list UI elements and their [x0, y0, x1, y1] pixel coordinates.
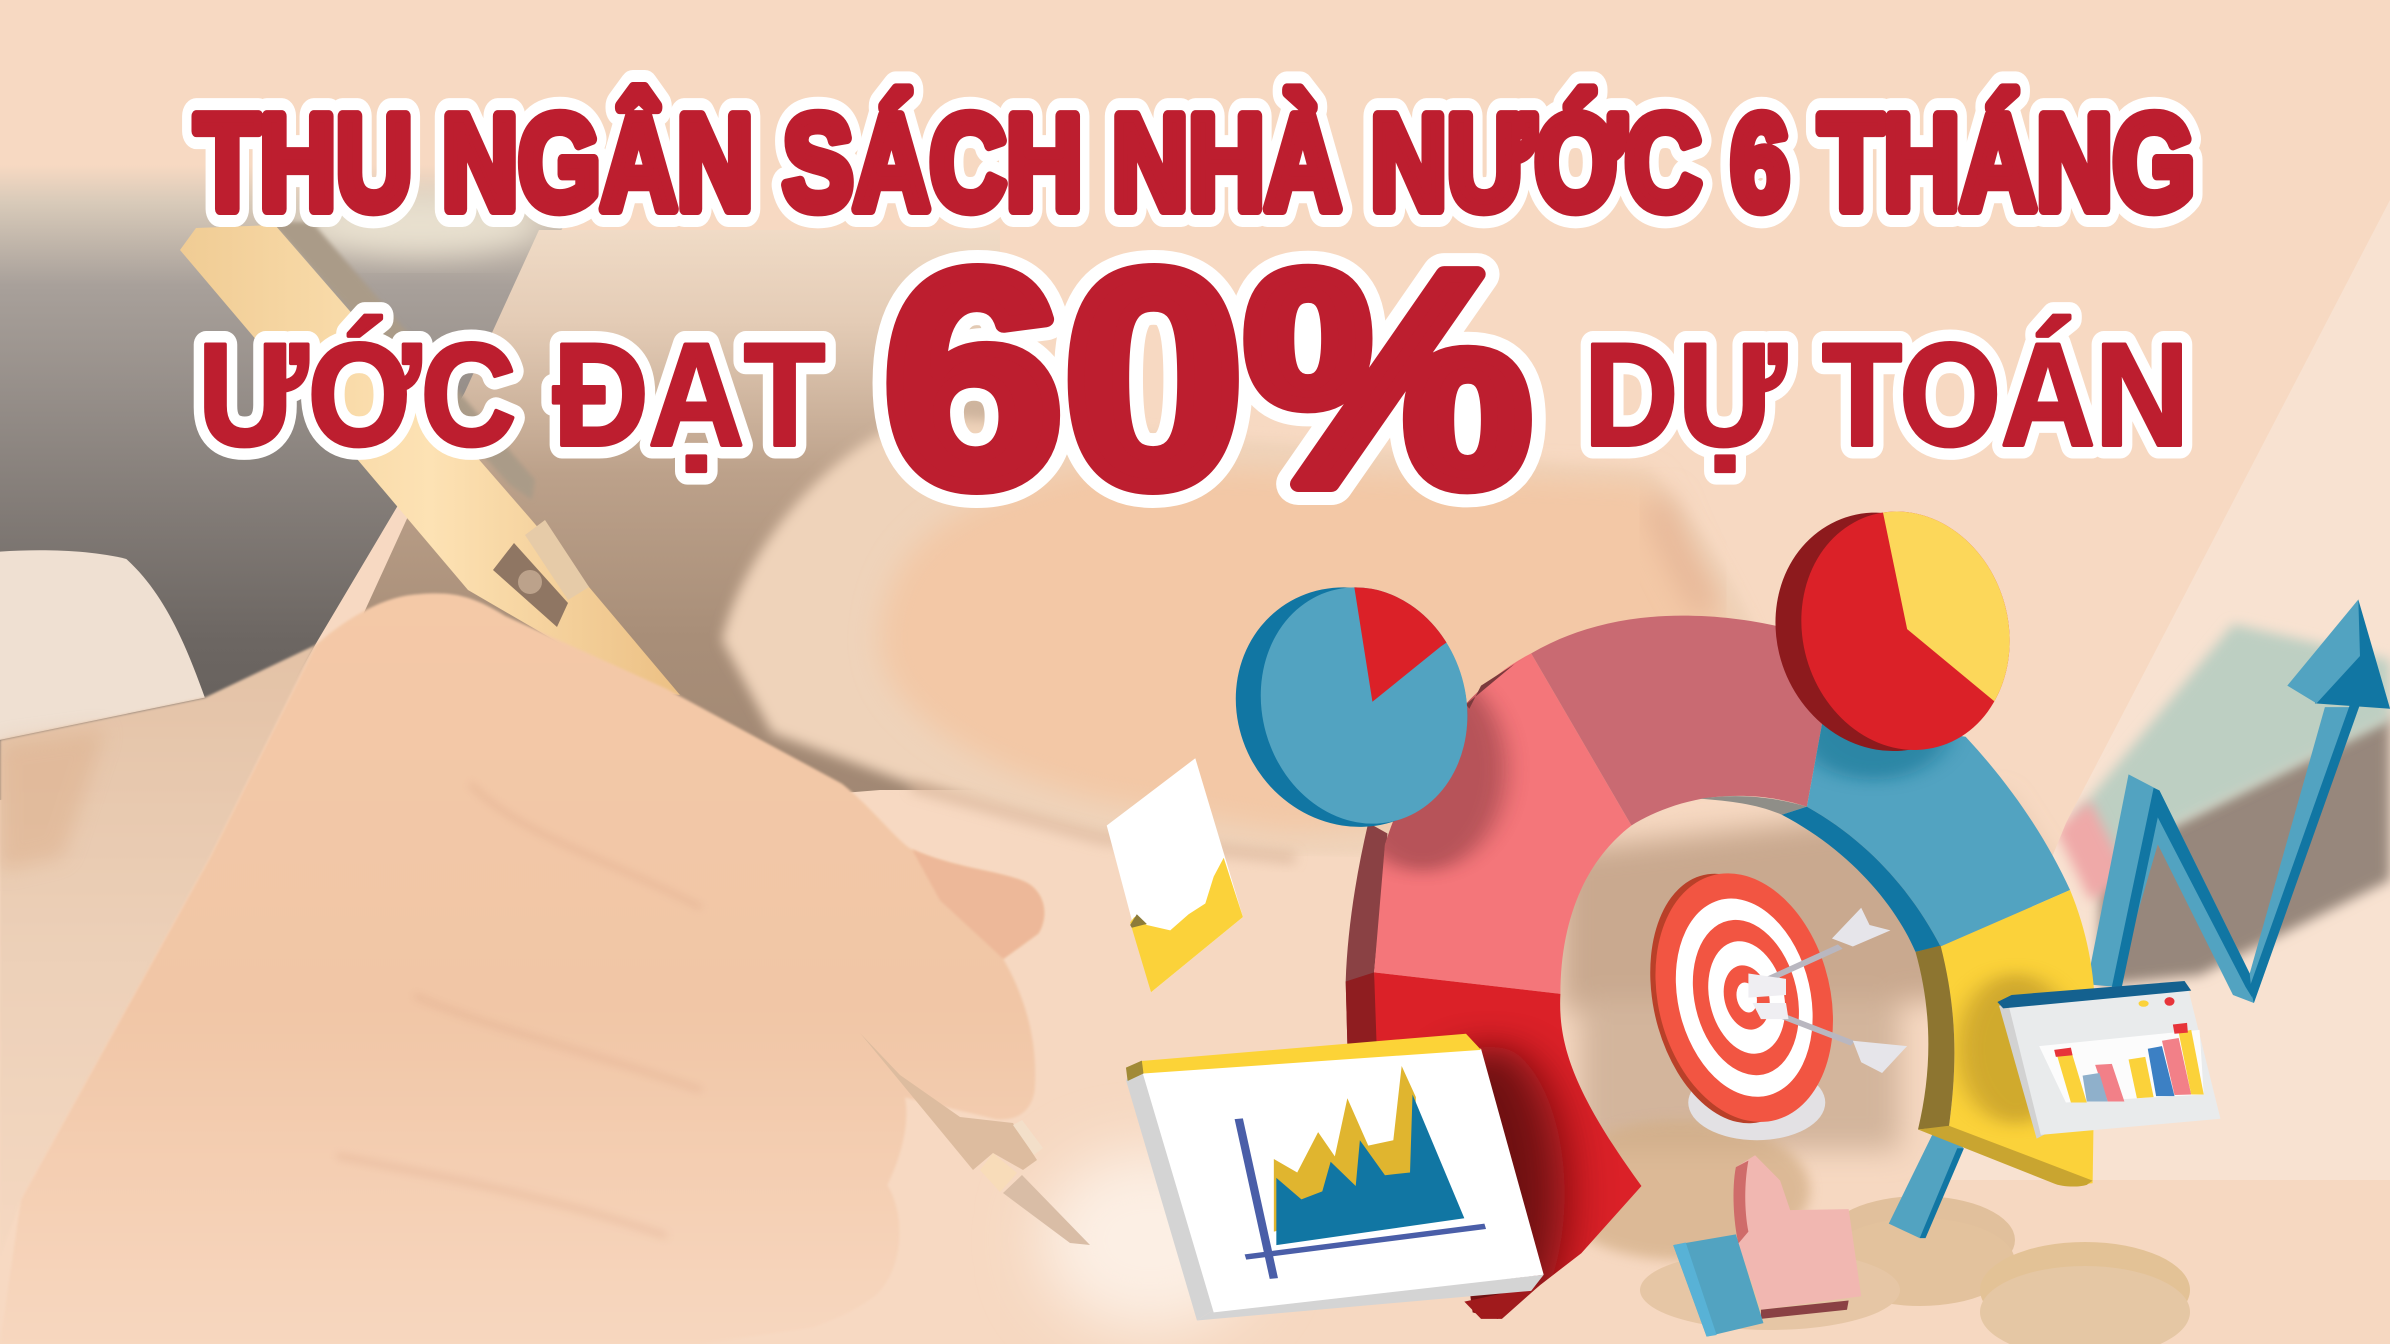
title line 2: left words: ƯỚC ĐẠT	[198, 313, 825, 476]
icon: thumbs up	[1673, 1155, 1861, 1337]
hand shadow on paper	[912, 786, 1295, 858]
chart: blue pie	[1236, 587, 1468, 827]
title line 2: right words: DỰ TOÁN	[1584, 313, 2189, 476]
arch back edge	[1346, 823, 1387, 1043]
light right triangle	[1920, 200, 2390, 1180]
calculator screen and body	[2056, 624, 2390, 985]
fingernail	[912, 849, 1044, 959]
chart: red and yellow pie	[1775, 512, 2010, 751]
title line 2: big 60 percent: 60%	[883, 208, 1532, 549]
title line 2: right words: DỰ TOÁN	[1584, 313, 2189, 476]
icon: rising zigzag arrow	[1889, 600, 2390, 1238]
hand	[0, 593, 1044, 1344]
finger creases	[337, 784, 702, 1236]
coins	[1550, 1120, 2190, 1344]
arch segment: red	[1374, 972, 1641, 1319]
background hand, blurred	[722, 415, 1780, 860]
title	[195, 87, 2195, 549]
paper and table	[1000, 810, 2390, 1344]
calculator, blurred	[1560, 800, 2090, 1150]
dark desk area, right of the diagonal	[260, 230, 1000, 840]
icon: target with arrows	[1632, 867, 1907, 1140]
area chart	[1239, 1066, 1485, 1278]
paper glow bottom left of chart card	[1040, 1150, 1260, 1330]
arch segment: yellow	[1941, 890, 2095, 1186]
shirt cuff	[0, 550, 205, 740]
writing hand photo	[0, 550, 1044, 1344]
infographic illustration	[1107, 500, 2390, 1344]
bars	[2054, 1023, 2204, 1103]
chart card: bar chart	[1997, 981, 2220, 1139]
sleeve	[0, 645, 316, 1258]
icon: small paper card	[1107, 758, 1243, 992]
title line 2: big 60 percent: 60%	[883, 208, 1532, 549]
arch segment: rose	[1531, 616, 1824, 825]
dark desk area, left of the diagonal	[0, 165, 600, 800]
pen barrel	[180, 222, 680, 695]
chart: arch gauge	[1339, 616, 2095, 1344]
arch segment: blue	[1807, 715, 2070, 947]
pen nib	[860, 1033, 1090, 1245]
title line 2: left words: ƯỚC ĐẠT	[198, 313, 825, 476]
pale glow behind pen	[300, 195, 540, 255]
arch segment: pink	[1374, 653, 1631, 994]
chart card: area chart	[1126, 1034, 1544, 1320]
